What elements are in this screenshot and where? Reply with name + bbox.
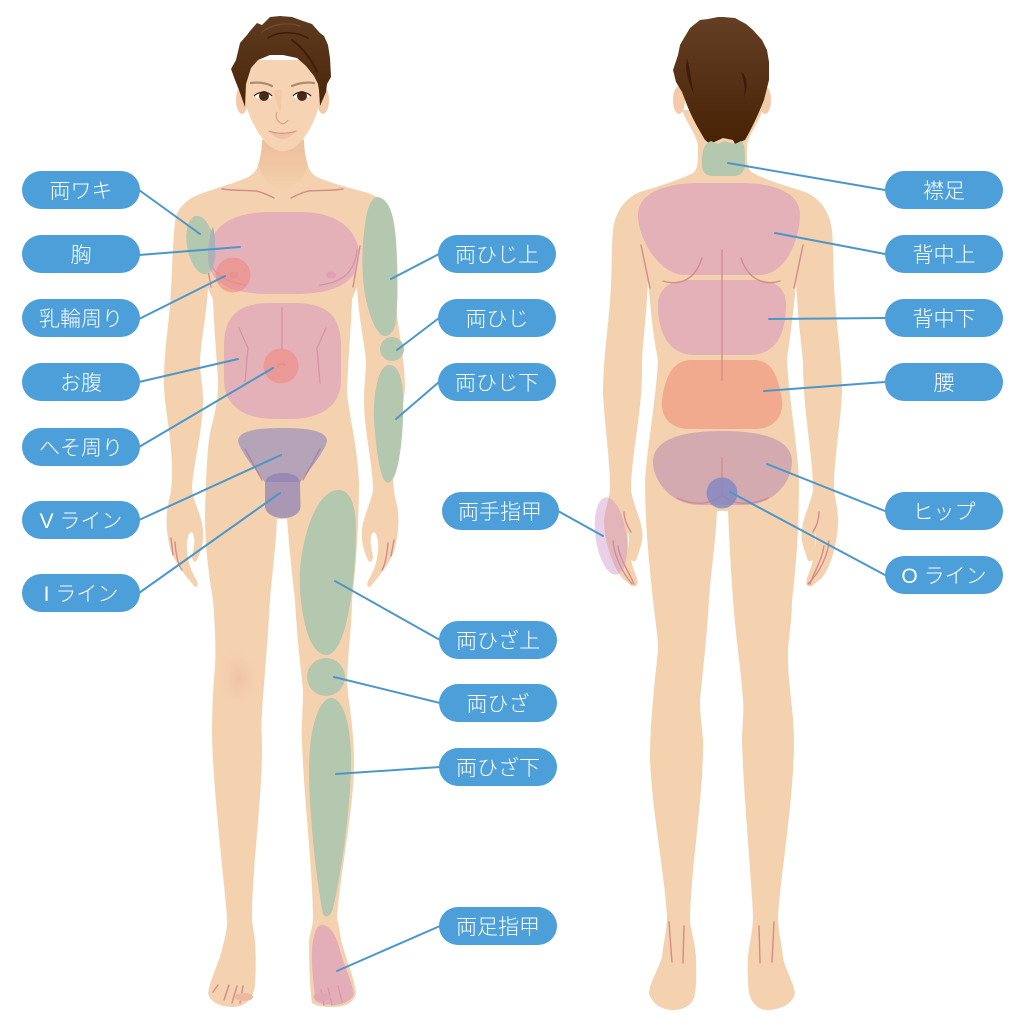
callout: I line: I ライン bbox=[44, 583, 118, 606]
zone: belly bbox=[224, 303, 341, 419]
callout: above knees: 両ひざ上 bbox=[456, 630, 540, 653]
callout: O line: O ライン bbox=[901, 565, 987, 588]
zone: O line bbox=[706, 478, 738, 508]
callout: V line: V ライン bbox=[40, 510, 122, 533]
armpit and chest overlap bbox=[208, 226, 215, 272]
callout: toenails: 両足指甲 bbox=[456, 916, 540, 939]
callout: lower back bbox=[769, 299, 1003, 337]
front body silhouette bbox=[164, 140, 405, 1007]
zone: nipple area bbox=[216, 258, 250, 292]
callout: above elbows bbox=[391, 235, 556, 279]
callout: areola: 乳輪周り bbox=[39, 308, 123, 331]
zone: navel bbox=[264, 348, 298, 384]
callout: fingernails: 両手指甲 bbox=[458, 501, 542, 524]
callout: navel: へそ周り bbox=[39, 437, 123, 460]
callout: chest bbox=[22, 235, 240, 273]
body creases bbox=[171, 189, 394, 1005]
eyebrows bbox=[251, 83, 314, 86]
callout: belly bbox=[22, 359, 238, 401]
zone: I line bbox=[265, 473, 300, 518]
callout: elbows bbox=[397, 299, 556, 350]
nipples bbox=[229, 272, 336, 278]
face bbox=[245, 60, 320, 151]
callout: V line bbox=[22, 455, 281, 539]
callout: elbows: 両ひじ bbox=[466, 308, 528, 331]
callout: I line bbox=[22, 493, 280, 612]
toes shading bbox=[235, 993, 331, 1001]
callout: belly: お腹 bbox=[60, 372, 102, 395]
callout: below elbows bbox=[396, 363, 556, 419]
hair strand highlights bbox=[686, 58, 747, 98]
callout: above elbows: 両ひじ上 bbox=[455, 244, 539, 267]
zone: hip bbox=[653, 431, 792, 505]
callout: below knees: 両ひざ下 bbox=[456, 757, 540, 780]
callout: nape: 襟足 bbox=[923, 180, 965, 203]
callout: waist bbox=[764, 363, 1003, 401]
zone: waist bbox=[662, 360, 782, 429]
zone: knee bbox=[307, 658, 345, 696]
callout: waist: 腰 bbox=[934, 372, 954, 395]
navel mark bbox=[277, 364, 285, 367]
callout: hip bbox=[767, 464, 1003, 530]
callout: below elbows: 両ひじ下 bbox=[455, 372, 539, 395]
back ears bbox=[673, 86, 771, 114]
callout: areola bbox=[22, 276, 225, 337]
zone: foot bbox=[312, 925, 354, 1005]
callout: chest: 胸 bbox=[70, 244, 92, 267]
callout: both armpits bbox=[22, 171, 200, 234]
callout: both armpits: 両ワキ bbox=[50, 180, 112, 203]
front figure bbox=[164, 16, 405, 1007]
zone: chest bbox=[208, 212, 359, 294]
hair bbox=[231, 16, 331, 107]
nose bbox=[274, 90, 282, 112]
callout: upper back bbox=[775, 233, 1003, 273]
zone: upper back bbox=[638, 183, 800, 275]
callout: lower back: 背中下 bbox=[912, 308, 976, 331]
callout: nape bbox=[728, 163, 1003, 209]
mouth bbox=[270, 132, 295, 139]
eyes bbox=[254, 91, 311, 101]
callout: above knees bbox=[335, 581, 557, 659]
zone: lower back bbox=[658, 280, 786, 355]
callout: fingernails bbox=[442, 492, 603, 536]
zone: elbow bbox=[380, 337, 404, 361]
zone: V line bbox=[238, 428, 327, 482]
callout: hip: ヒップ bbox=[912, 501, 976, 524]
knee shading bbox=[212, 642, 264, 714]
back body silhouette bbox=[603, 110, 842, 1010]
ears bbox=[236, 86, 329, 114]
zone: nape bbox=[702, 141, 745, 176]
callout: upper back: 背中上 bbox=[912, 244, 976, 267]
zone: thigh bbox=[300, 490, 356, 655]
hair strands bbox=[262, 24, 317, 72]
zone: lower leg bbox=[309, 698, 351, 916]
callout: knees: 両ひざ bbox=[466, 693, 530, 716]
zone: forearm bbox=[374, 365, 403, 483]
callout: O line bbox=[730, 492, 1003, 594]
zone: fingernails hand bbox=[590, 495, 632, 577]
callout: toenails bbox=[337, 907, 557, 971]
callout: below knees bbox=[336, 748, 557, 786]
callout: knees bbox=[334, 677, 557, 722]
back of hair bbox=[673, 17, 769, 144]
callout: navel bbox=[22, 368, 273, 466]
back creases bbox=[613, 245, 829, 963]
zone: armpit bbox=[182, 214, 220, 276]
back figure bbox=[590, 17, 842, 1010]
zone: upper arm bbox=[362, 197, 398, 336]
neck shadow bbox=[258, 140, 308, 192]
